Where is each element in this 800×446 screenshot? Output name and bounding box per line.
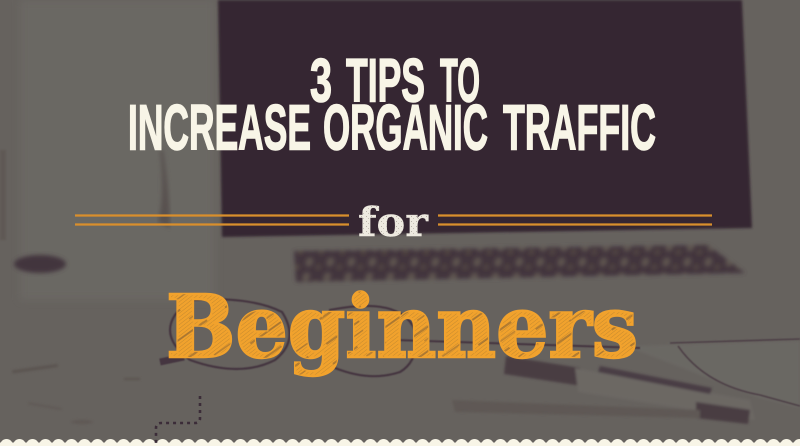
laptop keyboard bbox=[294, 245, 745, 282]
word: for: for bbox=[358, 199, 429, 246]
title line 2: ORGANIC bbox=[323, 92, 488, 164]
title: 3 tips to increase organic traffic bbox=[128, 46, 656, 164]
papers smudges bbox=[12, 364, 140, 424]
laptop screen bbox=[218, 0, 752, 237]
word: Beginners: Beginners bbox=[166, 277, 638, 378]
title line 1: 3 bbox=[310, 46, 332, 114]
title line 1: TIPS bbox=[346, 46, 425, 114]
title line 2: INCREASE bbox=[128, 92, 311, 164]
title: 3 tips to increase organic traffic: TO bbox=[440, 46, 480, 114]
dotted path connector bbox=[156, 396, 200, 446]
pens bbox=[452, 356, 755, 424]
title line 2: TRAFFIC bbox=[503, 92, 656, 164]
divider right bbox=[438, 216, 712, 224]
notebook and papers bbox=[625, 339, 800, 408]
glasses bbox=[160, 299, 640, 376]
divider left bbox=[75, 216, 349, 224]
scalloped bottom edge bbox=[0, 438, 800, 446]
title line 2 bbox=[128, 92, 656, 164]
word: Beginners: Beginners bbox=[166, 277, 638, 378]
